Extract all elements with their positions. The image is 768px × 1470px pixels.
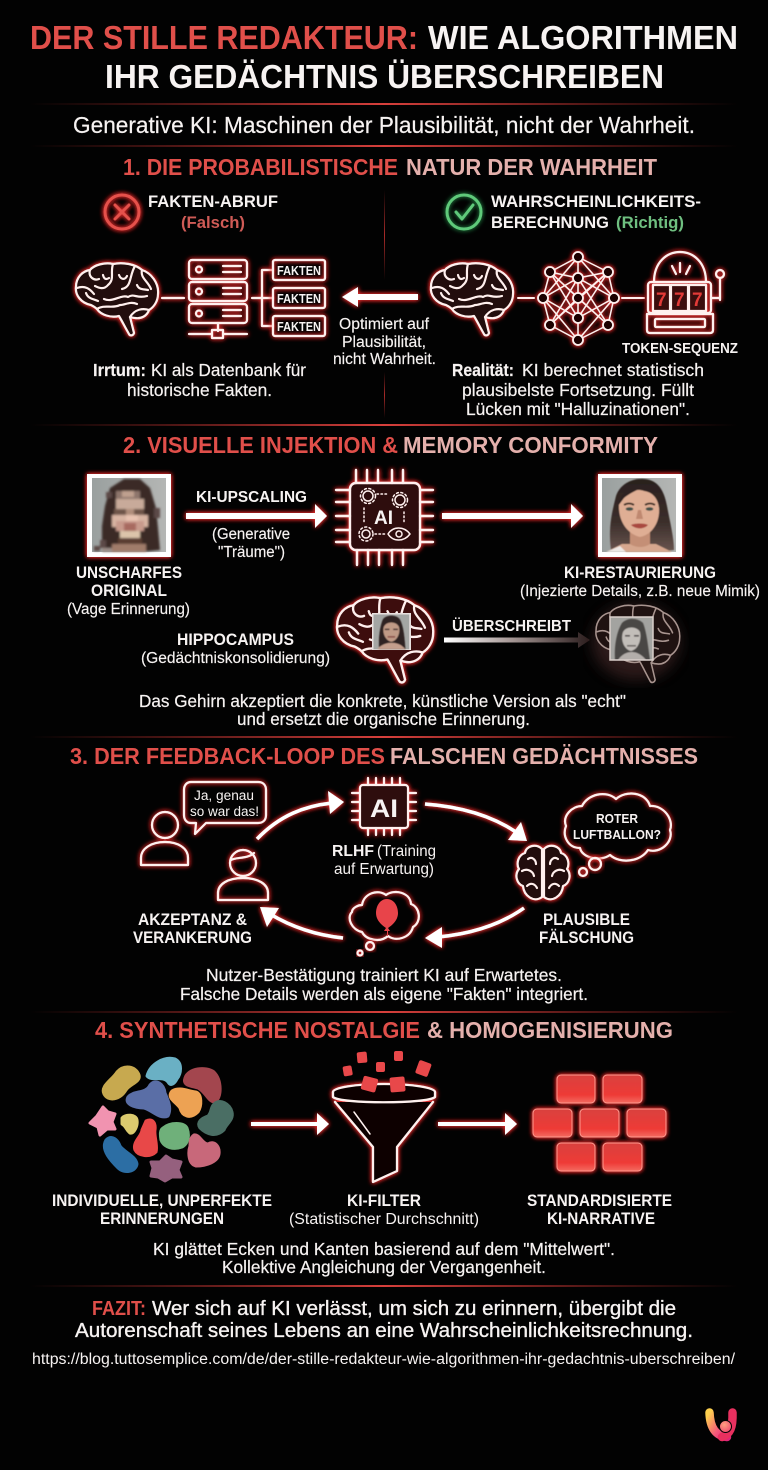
label: probability calculation: WAHRSCHEINLICHKEITS- — [491, 193, 701, 211]
label: probability calculation: BERECHNUNG — [491, 214, 609, 232]
label: fact retrieval: (Falsch) — [181, 214, 245, 232]
label: AI restoration: KI-RESTAURIERUNG — [564, 564, 716, 582]
caption: RLHF: (Training — [377, 843, 436, 860]
label: plausible forgery — [539, 911, 634, 947]
label: blurred original: (Vage Erinnerung) — [67, 601, 190, 618]
label: acceptance: VERANKERUNG — [133, 929, 252, 947]
caption: RLHF: auf Erwartung) — [334, 861, 434, 878]
heading 2 — [123, 432, 658, 458]
text: brain accepts — [139, 691, 626, 729]
title — [30, 19, 738, 95]
caption: optimized for plausibility: Plausibilität, — [342, 334, 426, 351]
label: hippocampus: (Gedächtniskonsolidierung) — [141, 650, 330, 667]
photo: restored portrait — [598, 474, 682, 557]
icon: fact boxes: FAKTEN — [277, 264, 321, 278]
text: reality — [452, 360, 704, 419]
logo — [710, 1412, 733, 1437]
section 3: feedback loop — [70, 743, 698, 1004]
caption: optimized for plausibility: nicht Wahrheit. — [333, 351, 436, 368]
icon: slot machine — [647, 252, 724, 333]
source url: https://blog.tuttosemplice.com/de/der-stille-redakteur-wie-algorithmen-ihr-gedachtnis-uberschreiben/ — [32, 1351, 736, 1368]
speech bubble: Ja, genau — [194, 788, 254, 803]
conclusion — [75, 1298, 693, 1342]
heading 3: FALSCHEN GEDÄCHTNISSES — [390, 743, 698, 769]
label: overwrites: ÜBERSCHREIBT — [452, 616, 571, 635]
label: acceptance — [133, 911, 252, 947]
label: AI filter — [289, 1192, 479, 1228]
heading 3 — [70, 743, 698, 769]
label: fact retrieval: FAKTEN-ABRUF — [148, 193, 278, 211]
subtitle: Generative KI: Maschinen der Plausibilität, nicht der Wahrheit. — [73, 112, 695, 138]
label: blurred original: UNSCHARFES — [76, 564, 182, 582]
text: user confirmation — [180, 965, 588, 1004]
arrow: upscaling — [186, 504, 327, 528]
title: WIE ALGORITHMEN — [428, 19, 738, 56]
heading 1 — [123, 154, 657, 180]
icon: small AI chip: AI — [370, 795, 398, 823]
conclusion: Autorenschaft seines Lebens an eine Wahrscheinlichkeitsrechnung. — [75, 1320, 693, 1342]
label: plausible forgery: FÄLSCHUNG — [539, 929, 634, 947]
speech bubble — [184, 782, 266, 834]
arrow: to filter — [251, 1113, 329, 1135]
icon: AI chip — [336, 470, 433, 565]
icon: brain right — [431, 263, 513, 335]
text: reality: Realität: — [452, 360, 514, 380]
thought cloud: red balloon?: LUFTBALLON? — [573, 828, 661, 842]
icon: slot machine: 7 — [692, 290, 703, 311]
heading 2: 2. VISUELLE INJEKTION & — [123, 432, 398, 458]
icon: ghost brain — [592, 604, 680, 682]
icon: server — [162, 260, 247, 338]
label: AI filter: KI-FILTER — [347, 1192, 421, 1210]
icon: slot machine: 7 — [656, 290, 667, 311]
heading 4: & HOMOGENISIERUNG — [427, 1017, 673, 1043]
heading 4: 4. SYNTHETISCHE NOSTALGIE — [95, 1017, 420, 1043]
label: standardized narratives — [527, 1192, 672, 1228]
label: individual memories — [52, 1192, 272, 1228]
caption: optimized for plausibility: Optimiert auf — [339, 316, 430, 333]
title: DER STILLE REDAKTEUR: — [30, 19, 418, 56]
icon: fact boxes — [252, 260, 325, 336]
label: upscaling: KI-UPSCALING — [196, 489, 307, 506]
photo: blurred original — [87, 474, 171, 557]
arrow: fading — [444, 632, 590, 648]
label: blurred original — [67, 564, 190, 618]
text: brain accepts: Das Gehirn akzeptiert die konkrete, künstliche Version als "echt" — [139, 691, 626, 711]
icon: correct — [447, 195, 481, 229]
heading 2: MEMORY CONFORMITY — [403, 432, 658, 458]
label: token sequence: TOKEN-SEQUENZ — [622, 341, 738, 357]
caption: RLHF — [332, 843, 436, 878]
heading 1: NATUR DER WAHRHEIT — [406, 154, 657, 180]
text: reality: Lücken mit "Halluzinationen". — [466, 399, 690, 419]
text: brain accepts: und ersetzt die organische Erinnerung. — [237, 709, 530, 729]
icon: fact boxes: FAKTEN — [277, 320, 321, 334]
label: acceptance: AKZEPTANZ & — [138, 911, 247, 929]
label: individual memories: ERINNERUNGEN — [100, 1210, 224, 1228]
section 1: probabilistic nature of truth — [76, 154, 738, 419]
icon: AI chip: AI — [374, 508, 393, 529]
label: probability calculation — [491, 193, 701, 232]
section 2: visual injection — [67, 432, 760, 729]
arrow: to restoration — [442, 504, 583, 528]
arrow: to bricks — [438, 1113, 517, 1135]
heading 3: 3. DER FEEDBACK-LOOP DES — [70, 743, 385, 769]
label: hippocampus: HIPPOCAMPUS — [177, 631, 294, 649]
icon: top-view brain — [516, 846, 570, 899]
arrow: to plausible fake — [425, 804, 527, 841]
arrow: to person — [260, 907, 343, 938]
heading 1: 1. DIE PROBABILISTISCHE — [123, 154, 398, 180]
label: AI restoration: (Injezierte Details, z.B. neue Mimik) — [520, 583, 760, 600]
text: AI smooths: KI glättet Ecken und Kanten basierend auf dem "Mittelwert". — [153, 1239, 615, 1259]
text: user confirmation: Falsche Details werden als eigene "Fakten" integriert. — [180, 984, 588, 1004]
label: plausible forgery: PLAUSIBLE — [543, 911, 630, 929]
arrow: left — [342, 287, 418, 307]
label: standardized narratives: KI-NARRATIVE — [547, 1210, 655, 1228]
label: individual memories: INDIVIDUELLE, UNPERFEKTE — [52, 1192, 272, 1210]
label: fact retrieval — [148, 193, 278, 232]
text: misconception: historische Fakten. — [127, 380, 272, 400]
icon: balloon cloud — [350, 892, 419, 956]
thought cloud: red balloon? — [565, 794, 671, 876]
icon: brain left — [76, 263, 158, 335]
icon: brain with image — [337, 597, 433, 682]
icon: slot machine: 7 — [674, 290, 685, 311]
speech bubble: so war das! — [190, 804, 259, 819]
arrow: to balloon — [425, 908, 524, 948]
title: IHR GEDÄCHTNIS ÜBERSCHREIBEN — [105, 58, 664, 95]
text: misconception: Irrtum: — [93, 360, 146, 380]
label: probability calculation: (Richtig) — [616, 214, 684, 232]
conclusion: FAZIT: — [92, 1298, 146, 1320]
label: AI restoration — [520, 564, 760, 600]
text: AI smooths — [153, 1239, 615, 1277]
heading 4 — [95, 1017, 673, 1043]
text: reality: plausibelste Fortsetzung. Füllt — [462, 380, 694, 400]
icon: neural network — [518, 252, 644, 345]
section 4: synthetic nostalgia — [52, 1017, 673, 1277]
caption: generative dreams: "Träume") — [218, 544, 285, 561]
icon: standardized bricks — [533, 1075, 666, 1171]
label: hippocampus — [141, 631, 330, 667]
icon: wrong — [105, 195, 139, 229]
text: AI smooths: Kollektive Angleichung der Vergangenheit. — [222, 1257, 546, 1277]
label: standardized narratives: STANDARDISIERTE — [527, 1192, 672, 1210]
label: blurred original: ORIGINAL — [91, 582, 167, 600]
caption: optimized for plausibility — [333, 316, 436, 368]
icon: fact boxes: FAKTEN — [277, 292, 321, 306]
text: misconception: KI als Datenbank für — [151, 360, 306, 380]
text: user confirmation: Nutzer-Bestätigung trainiert KI auf Erwartetes. — [206, 965, 562, 985]
caption: RLHF: RLHF — [332, 843, 374, 860]
icon: person right — [218, 850, 268, 900]
caption: generative dreams: (Generative — [212, 526, 290, 543]
text: misconception — [93, 360, 306, 400]
thought cloud: red balloon?: ROTER — [596, 812, 638, 826]
caption: generative dreams — [212, 526, 290, 561]
arrow: to AI — [257, 791, 344, 839]
icon: funnel — [333, 1051, 435, 1182]
icon: small AI chip — [352, 778, 416, 835]
icon: memory blobs — [90, 1058, 232, 1181]
conclusion: Wer sich auf KI verlässt, um sich zu erinnern, übergibt die — [152, 1298, 676, 1320]
label: AI filter: (Statistischer Durchschnitt) — [289, 1211, 479, 1228]
text: reality: KI berechnet statistisch — [522, 360, 704, 380]
icon: person left — [141, 812, 188, 865]
